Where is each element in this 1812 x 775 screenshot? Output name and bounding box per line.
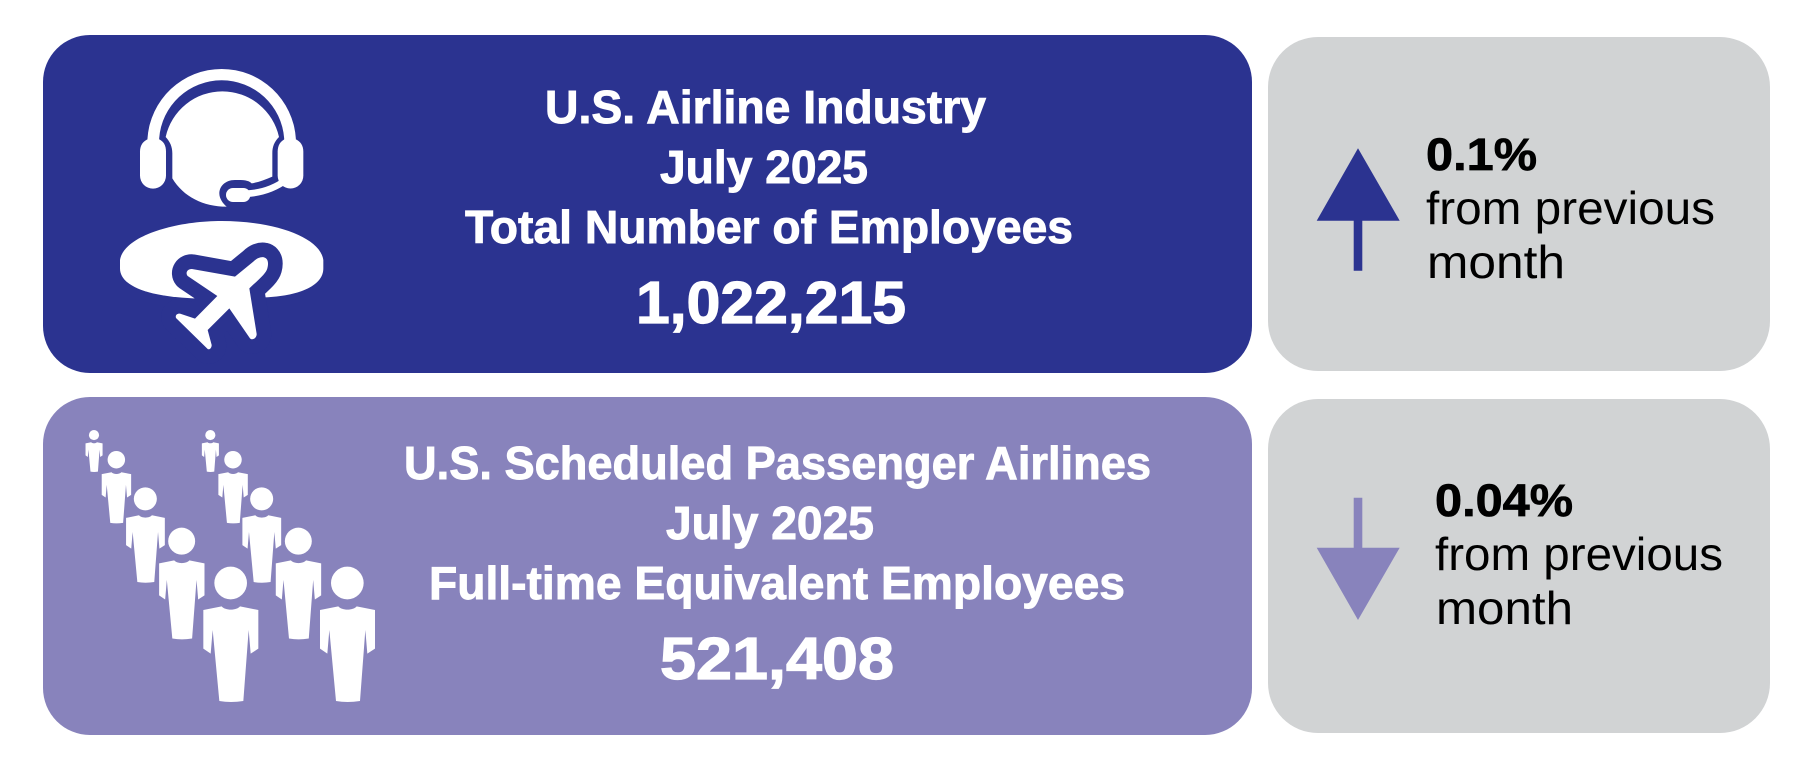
panel: monthly change up — [1268, 37, 1770, 371]
text: from previous: from previous — [1426, 182, 1715, 234]
icon part: microphone — [226, 188, 250, 202]
panel: U.S. airline industry total employees — [43, 35, 1252, 373]
icon part: head — [166, 91, 279, 207]
number: 1,022,215: 1,022,215 — [636, 270, 906, 336]
icon part: headband — [147, 69, 296, 140]
heading: Total Number of Employees: Total Number of Employees — [465, 201, 1073, 253]
icon part: left ear cup — [140, 139, 166, 189]
panel: scheduled passenger airlines full-time equivalent employees — [43, 397, 1252, 735]
icon: rows of people — [86, 430, 375, 702]
panel: monthly change down — [1268, 399, 1770, 733]
icon part: shoulders — [120, 221, 323, 298]
text: month: month — [1436, 582, 1573, 634]
text: month: month — [1427, 236, 1565, 288]
heading: U.S. Scheduled Passenger Airlines: U.S. Scheduled Passenger Airlines — [404, 437, 1151, 489]
icon part: right ear cup — [278, 139, 303, 188]
arrow: down — [1317, 498, 1400, 620]
icon: headset agent with airplane — [120, 69, 323, 349]
number: 521,408: 521,408 — [660, 626, 894, 692]
icon part: airplane — [176, 257, 268, 349]
text: 0.04%: 0.04% — [1435, 475, 1573, 526]
heading: Full-time Equivalent Employees: Full-time Equivalent Employees — [429, 557, 1125, 609]
icon part: airplane outline cut-out — [176, 257, 268, 349]
text: from previous: from previous — [1435, 528, 1723, 580]
icon part: microphone boom — [247, 180, 286, 194]
heading: July 2025: July 2025 — [666, 497, 874, 549]
heading: July 2025: July 2025 — [660, 141, 868, 193]
arrow: up — [1317, 148, 1400, 271]
heading: U.S. Airline Industry: U.S. Airline Industry — [545, 81, 986, 133]
text: 0.1%: 0.1% — [1426, 129, 1537, 180]
